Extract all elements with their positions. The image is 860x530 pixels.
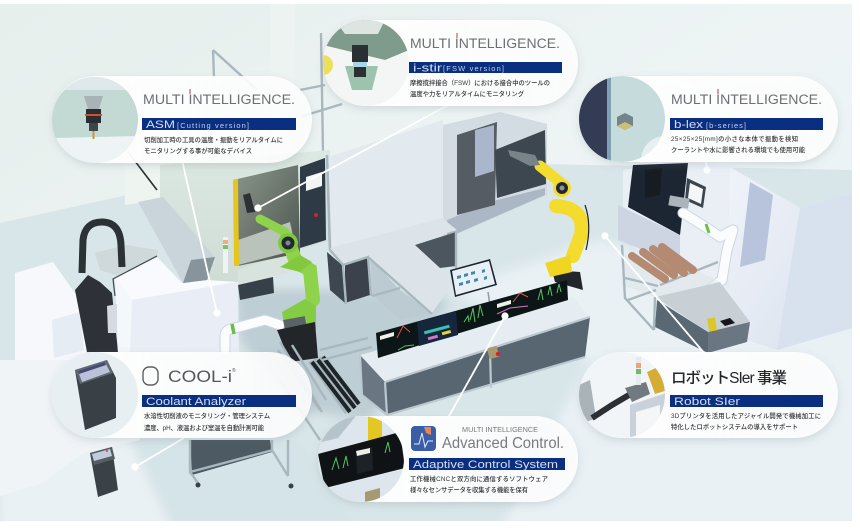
description: 摩擦撹拌接合（FSW）における接合中のツールの (410, 78, 550, 87)
panel: Robot SIer: Robot SIer (674, 396, 740, 408)
panel: i-stir: [FSW version] (443, 64, 504, 73)
right collaborative robot (668, 195, 738, 286)
front monitor table (360, 316, 590, 416)
leader line and dot: Advanced Control (448, 312, 509, 418)
panel: b-lex: b-lex (674, 119, 704, 131)
leader line and dot: ASM (182, 160, 221, 317)
panel: i-stir (313, 20, 578, 106)
COOL-i wordmark: COOL-i (168, 368, 232, 386)
dark base and conveyor (277, 322, 372, 440)
product bar (142, 118, 296, 130)
icon: Advanced Control app (411, 426, 436, 451)
row of dashboard monitors (376, 280, 568, 358)
product bar (409, 458, 565, 470)
leader line and dot: b-lex (703, 160, 711, 174)
yellow robot arm (508, 150, 589, 290)
panel: Robot SIer: 特化したロボットシステムの導入をサポート (671, 422, 798, 431)
description: 25×25×25[mm]の小さな本体で振動を検知 (671, 134, 798, 143)
white collaborative robot, left (225, 316, 307, 350)
description: 工作機械CNCと双方向に通信するソフトウェア (410, 474, 548, 483)
panel: ASM: ASM (146, 119, 175, 131)
large partition wall (327, 120, 443, 250)
panel: COOL-i: 濃度、pH、液温および室温を自動計測可能 (144, 423, 265, 432)
panel: i-stir: i-stir (413, 62, 442, 74)
L-shaped table (327, 218, 457, 320)
lathe machine with dark door (443, 112, 547, 238)
machine door opening (233, 165, 300, 266)
panel: b-lex: [b-series] (706, 121, 746, 130)
product bar (409, 62, 562, 73)
black rod (134, 160, 158, 190)
left white cabinet (0, 262, 140, 496)
panel: Advanced Control: Adaptive Control System (413, 459, 558, 471)
icon: COOL-i logo ring (143, 367, 158, 385)
black hose arch (82, 222, 122, 273)
leader line and dot: i-stir (254, 104, 450, 212)
brand wordmark: MULTI INTELLIGENCE. (143, 92, 295, 107)
leader line and dot: Robot SIer (601, 232, 705, 354)
panel: ASM (52, 76, 312, 163)
silver tank behind machine (95, 245, 158, 275)
panel: Advanced Control (318, 416, 578, 502)
table under coolant panel (190, 342, 326, 488)
Advanced Control wordmark: Advanced Control. (442, 435, 564, 452)
photo: dashboard monitors (318, 416, 405, 502)
right machine black door (628, 163, 706, 235)
registered mark: ® (232, 367, 236, 374)
brand wordmark: MULTI INTELLIGENCE. (671, 92, 822, 107)
brand small wordmark: MULTI INTELLIGENCE (462, 425, 538, 434)
photo: robot wrist and signal tower (579, 352, 668, 438)
photo: FSW tool (323, 20, 409, 106)
panel: Advanced Control: 様々なセンサデータを収集する機能を保有 (410, 485, 528, 494)
product bar (142, 395, 296, 407)
dark control panel (300, 158, 326, 248)
product bar (670, 395, 823, 407)
right table (622, 245, 750, 353)
panel: Robot SIer (579, 352, 838, 438)
product bar (670, 118, 823, 130)
photo: cutting tool holder (52, 76, 138, 163)
panel: ASM: モニタリングする事が可能なデバイス (144, 146, 252, 155)
main white machine (107, 197, 239, 352)
photo: coolant analyzer (52, 352, 138, 438)
right white machine (618, 160, 852, 350)
green robot arm (243, 193, 316, 330)
panel: COOL-i: Coolant Analyzer (146, 396, 246, 408)
brand wordmark: MULTI INTELLIGENCE. (410, 36, 560, 51)
panel: b-lex (578, 76, 840, 168)
stock rollers (632, 247, 693, 279)
description: 3Dプリンタを活用したアジャイル開発で機械加工に (671, 411, 821, 420)
signal tower (223, 237, 228, 273)
coolant analyzer device on floor (90, 447, 118, 497)
back aluminium frames (213, 33, 342, 152)
panel: b-lex: クーラントや水に影響される環境でも使用可能 (671, 145, 806, 154)
description: 切削加工時の工具の温度・振動をリアルタイムに (144, 135, 283, 144)
description: 水溶性切削液のモニタリング・管理システム (144, 411, 270, 420)
dark machine part (75, 275, 118, 352)
panel: ASM: [Cutting version] (177, 121, 249, 130)
photo: b-lex sensor cube (579, 76, 665, 162)
panel: COOL-i (52, 352, 312, 438)
green-walled machine (160, 150, 330, 300)
panel: i-stir: 温度や力をリアルタイムにモニタリング (410, 89, 525, 98)
leader line and dot: COOL-i (131, 438, 184, 471)
tablet monitor (450, 259, 497, 305)
Robot SIer heading: ロボットSIer 事業 (671, 369, 787, 387)
